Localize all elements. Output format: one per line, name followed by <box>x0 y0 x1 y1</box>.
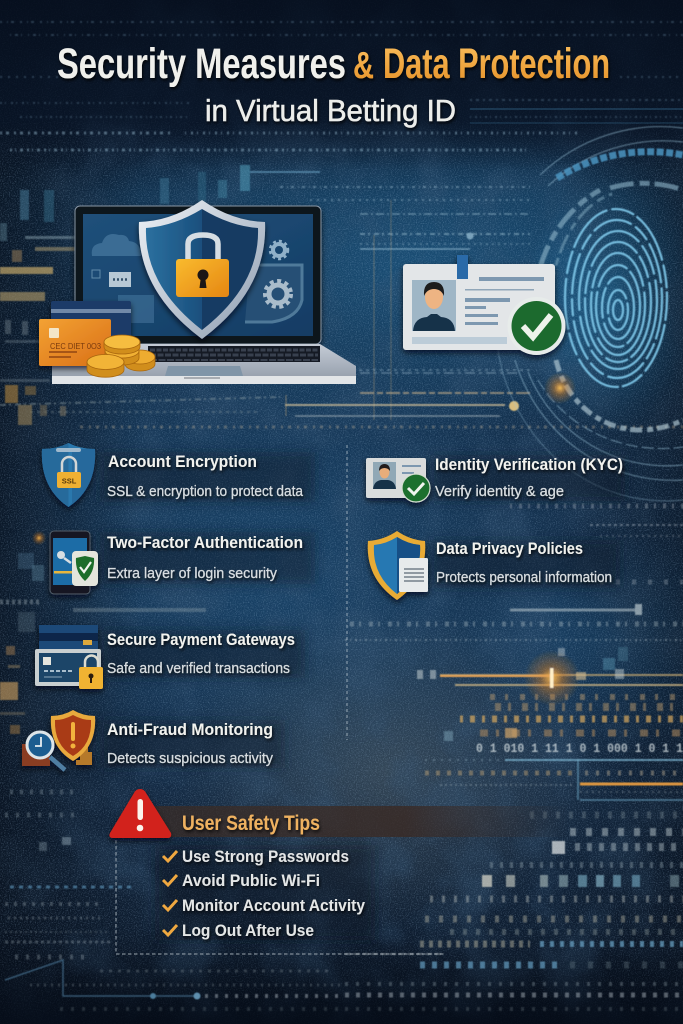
tip: avoid public wifi: Avoid Public Wi-Fi <box>182 871 320 890</box>
heading: Identity Verification (KYC) <box>435 455 623 474</box>
description: SSL & encryption to protect data <box>107 484 304 500</box>
icon: ID card with check <box>366 458 430 502</box>
gold coins <box>87 335 155 377</box>
laptop base <box>52 344 356 384</box>
shield with padlock <box>139 200 265 339</box>
heading: Two-Factor Authentication <box>107 533 303 552</box>
tip: log out: Log Out After Use <box>182 921 314 940</box>
feature: Anti-Fraud Monitoring <box>22 710 290 770</box>
icon: SSL shield: SSL <box>62 476 77 486</box>
icon: warning shield and magnifier <box>22 710 95 770</box>
title: Security Measures <box>57 40 346 88</box>
icon: cards and lock <box>35 625 103 689</box>
description: Verify identity & age <box>435 484 564 500</box>
divider: vertical dashed <box>346 445 348 740</box>
description: Extra layer of login security <box>107 566 278 582</box>
feature: Data Privacy Policies <box>368 531 612 600</box>
text backdrop shading <box>100 452 625 940</box>
laptop hero illustration <box>39 200 356 384</box>
heading: Anti-Fraud Monitoring <box>107 720 273 739</box>
feature: Secure Payment Gateways <box>35 625 300 689</box>
tip: monitor activity: Monitor Account Activity <box>182 896 365 915</box>
ID card hero illustration <box>403 255 566 355</box>
laptop screen <box>75 206 321 344</box>
feature: Identity Verification (KYC) <box>366 455 623 502</box>
heading: Secure Payment Gateways <box>107 630 295 649</box>
payment cards <box>39 301 131 366</box>
icon: phone with check <box>50 531 98 594</box>
fingerprint graphic <box>498 127 683 501</box>
description: Protects personal information <box>436 570 612 586</box>
payment cards: CEC DIET 0O3 <box>50 342 102 351</box>
title: & <box>353 45 374 87</box>
description: Safe and verified transactions <box>107 661 290 677</box>
subtitle: in Virtual Betting ID <box>205 93 456 128</box>
title <box>57 40 610 88</box>
feature: Two-Factor Authentication <box>50 531 306 594</box>
heading: Data Privacy Policies <box>436 539 583 558</box>
panel: user safety tips <box>95 789 570 954</box>
tip: strong passwords: Use Strong Passwords <box>182 847 349 866</box>
tips heading: User Safety Tips <box>182 812 320 835</box>
left data blocks <box>0 190 340 1009</box>
header band <box>155 806 570 837</box>
description: Detects suspicious activity <box>107 751 274 767</box>
feature: Account Encryption <box>42 443 304 507</box>
green check badge <box>508 297 566 355</box>
right data blocks <box>345 647 683 1009</box>
dashed box <box>116 840 445 954</box>
icon: SSL shield <box>42 443 95 507</box>
icon: shield with document <box>368 531 428 600</box>
heading: Account Encryption <box>108 452 257 471</box>
icon: warning triangle <box>109 789 171 838</box>
